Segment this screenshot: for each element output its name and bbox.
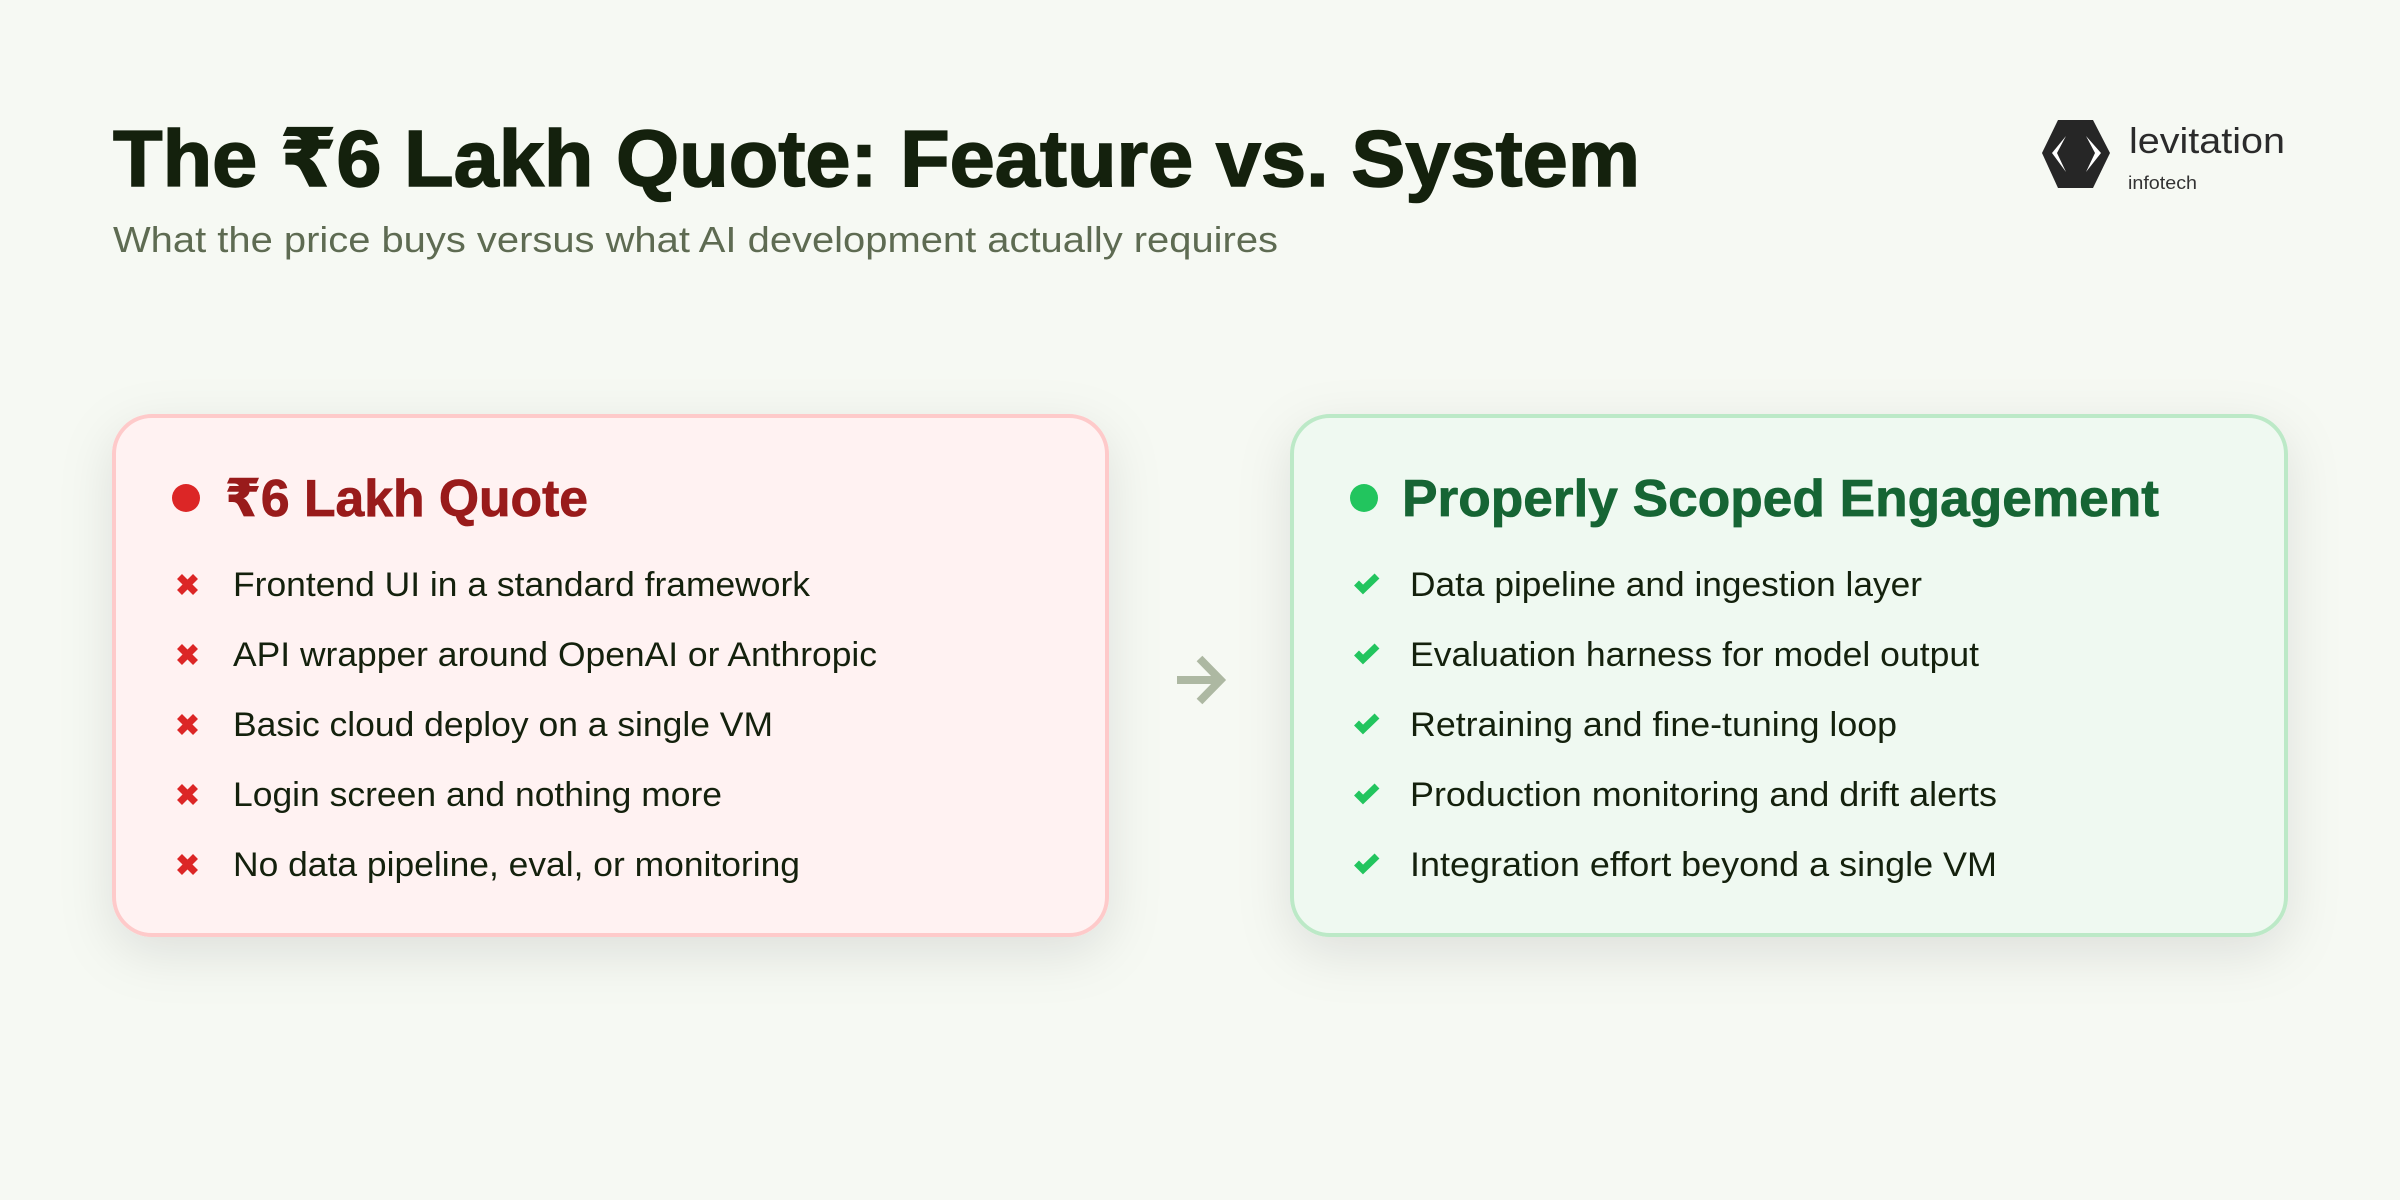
icon: logo hexagon	[2042, 120, 2110, 188]
list item: data pipeline: Data pipeline and ingestion layer	[1410, 566, 1922, 604]
list item: retraining: Retraining and fine-tuning loop	[1410, 706, 1897, 744]
panel: properly scoped engagement	[1292, 416, 2286, 935]
panel heading: Properly Scoped Engagement	[1402, 470, 2159, 528]
status dot: green	[1350, 484, 1378, 512]
list item: login: Login screen and nothing more	[233, 776, 722, 814]
logo tagline: infotech	[2128, 173, 2197, 193]
list item: cloud deploy: Basic cloud deploy on a single VM	[233, 706, 773, 744]
panel: 6 lakh quote	[114, 416, 1107, 935]
title: The ₹6 Lakh Quote: Feature vs. System	[113, 114, 1640, 203]
logo wordmark: levitation	[2129, 120, 2285, 161]
list item: evaluation harness: Evaluation harness for model output	[1410, 636, 1980, 674]
list item: monitoring: Production monitoring and drift alerts	[1410, 776, 1997, 814]
list item: integration: Integration effort beyond a single VM	[1410, 846, 1997, 884]
list item: frontend: Frontend UI in a standard framework	[233, 566, 811, 604]
list item: api wrapper: API wrapper around OpenAI or Anthropic	[233, 636, 877, 674]
subtitle: What the price buys versus what AI development actually requires	[113, 219, 1278, 260]
status dot: red	[172, 484, 200, 512]
panel background	[1292, 416, 2286, 935]
panel background	[114, 416, 1107, 935]
panel heading: ₹6 Lakh Quote	[225, 470, 588, 528]
logo: levitation infotech	[2042, 120, 2285, 193]
list item: no pipeline: No data pipeline, eval, or monitoring	[233, 846, 800, 884]
arrow	[1177, 658, 1220, 702]
